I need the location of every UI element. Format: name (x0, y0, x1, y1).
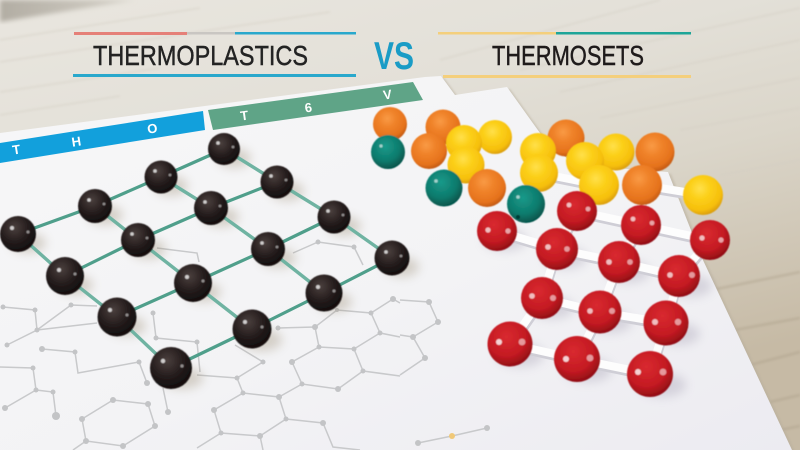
paper header band: green tab: V (382, 86, 393, 103)
molecular model: black and green thermoplastic grid (0, 133, 419, 389)
title: Thermoplastics: THERMOPLASTICS (93, 40, 308, 71)
printed hexagon network on paper (0, 240, 490, 450)
paper header band: blue tab: O (146, 120, 158, 137)
paper header band: blue tab (0, 111, 205, 163)
title: Thermosets (438, 32, 691, 78)
title: VS: VS (374, 35, 414, 78)
paper header band: blue tab: H (70, 133, 82, 150)
paper header band: green tab: 6 (304, 100, 313, 115)
paper header band: green tab: T (239, 108, 249, 124)
title: Thermosets: THERMOSETS (492, 40, 644, 71)
paper header band: blue tab: T (11, 142, 21, 158)
molecular model: thermoset network with white bonds (371, 107, 730, 397)
paper header band: green tab (208, 82, 423, 130)
title: Thermoplastics (73, 32, 356, 77)
